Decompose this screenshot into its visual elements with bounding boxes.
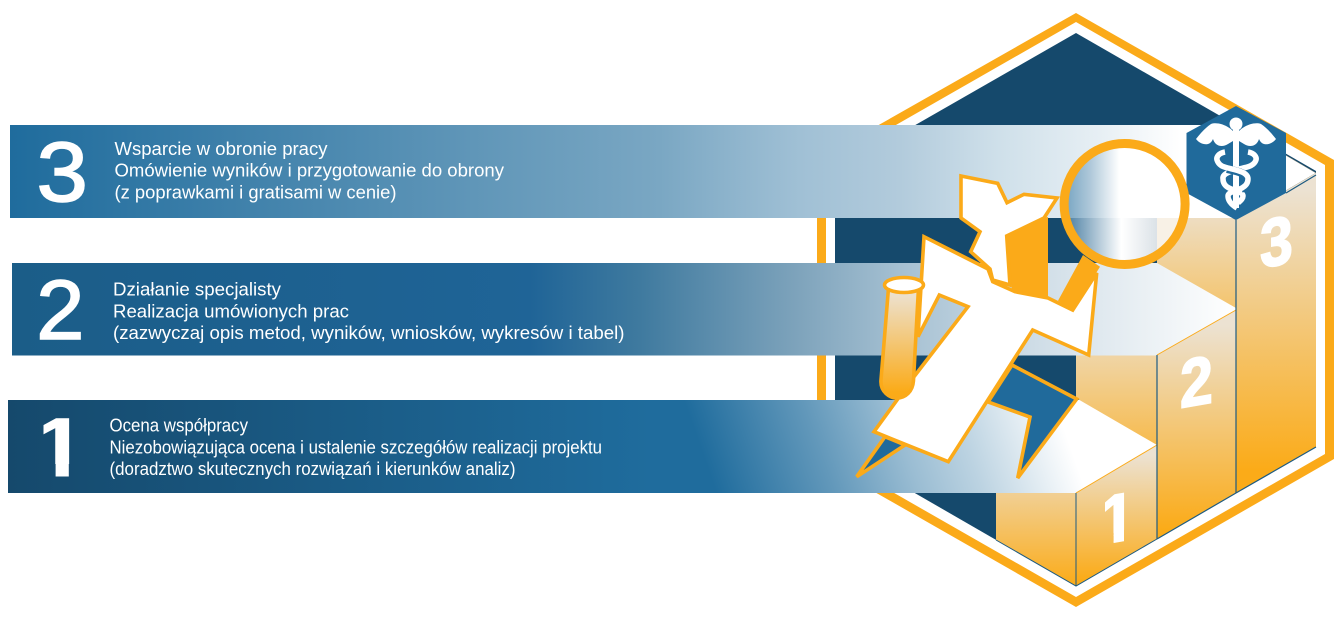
step 3 text: Wsparcie w obronie pracy (114, 138, 328, 159)
step 2 text: (zazwyczaj opis metod, wyników, wniosków, wykresów i tabel) (113, 322, 624, 343)
cube number 2: 2 (1180, 341, 1213, 423)
step 3 left face (1157, 173, 1236, 308)
magnifier handle (1058, 255, 1100, 310)
figure: head (961, 176, 1057, 285)
panel: step 3 bar (10, 125, 1236, 219)
step 2 number: 2 (36, 264, 84, 358)
figure: rear foot (857, 437, 905, 477)
step 2 text: Realizacja umówionych prac (113, 300, 349, 321)
step 2 text (113, 279, 624, 343)
magnifier lens (1064, 140, 1187, 268)
cube number 3: 3 (1260, 201, 1293, 283)
step 3 top face (1157, 126, 1316, 220)
panel: step 1 bar (8, 400, 1157, 495)
step 1 text: (doradztwo skutecznych rozwiązań i kierunków analiz) (110, 458, 516, 479)
step 1 number: 1 (32, 400, 88, 495)
step 2 right face (1157, 310, 1236, 539)
step 3 text: (z poprawkami i gratisami w cenie) (114, 181, 396, 202)
figure: body and front leg (874, 237, 1097, 462)
step 1 text: Ocena współpracy (110, 414, 249, 436)
step 2 left face (1076, 310, 1157, 445)
step 1 text (110, 414, 602, 479)
hexagon: navy background (835, 33, 1316, 586)
icon: caduceus hexagon (1186, 106, 1286, 220)
hexagon: orange outline (817, 13, 1334, 607)
icon: test tube (881, 278, 924, 398)
step 1 left face (996, 446, 1076, 586)
panel: step 2 bar (12, 263, 1236, 358)
figure: torso shade (1007, 217, 1048, 298)
step 3 text (114, 138, 505, 202)
step 1 text: Niezobowiązująca ocena i ustalenie szczegółów realizacji projektu (110, 436, 602, 457)
step 3 right face (1236, 173, 1316, 493)
step 3 number: 3 (36, 125, 88, 219)
step 2 text: Działanie specjalisty (113, 279, 282, 300)
figure: rear leg (988, 365, 1077, 478)
step 1 right face (996, 445, 1157, 586)
cube number 1: 1 (1099, 478, 1135, 560)
step 3 text: Omówienie wyników i przygotowanie do obrony (114, 160, 505, 181)
